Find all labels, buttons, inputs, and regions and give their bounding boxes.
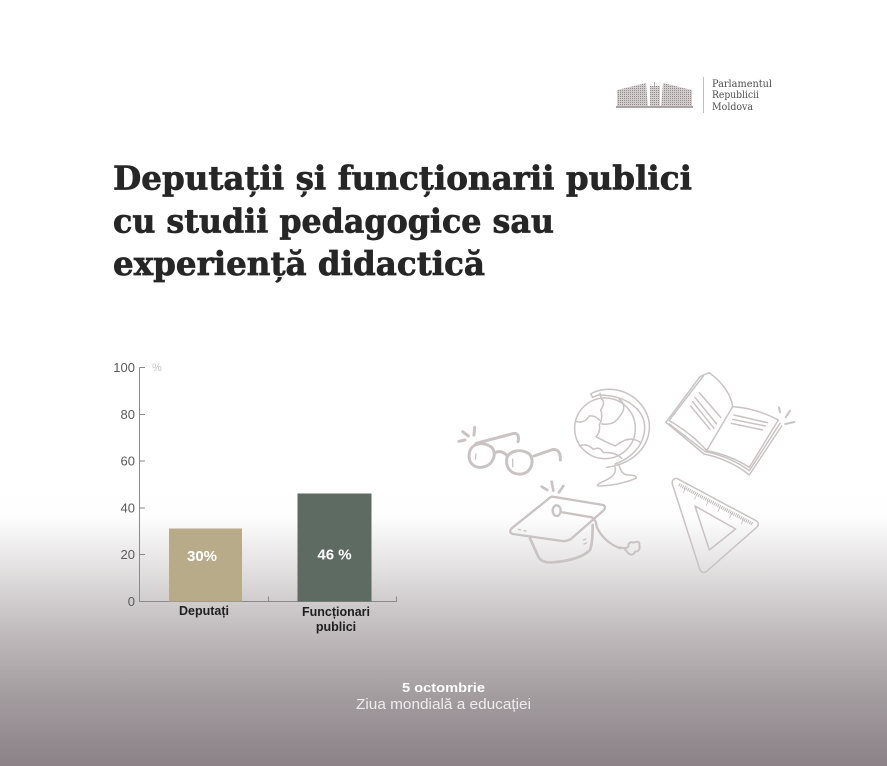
icon: tassel — [620, 542, 640, 555]
axes — [140, 368, 397, 602]
title: experiență didactică — [113, 244, 485, 283]
icon: parliament building — [616, 82, 693, 108]
bar: Funcționari publici 46% — [298, 494, 372, 602]
title: Deputații și funcționarii publici — [113, 158, 692, 198]
icon: graduation cap — [510, 482, 620, 562]
illustrations: education doodles — [459, 373, 794, 572]
x-axis labels: Deputați — [179, 604, 229, 618]
y-axis labels: 0 — [128, 594, 135, 609]
footer: date and occasion — [356, 680, 531, 713]
x-axis labels: publici — [316, 620, 356, 634]
bar chart — [113, 360, 397, 634]
y-axis labels: 20 — [121, 547, 135, 562]
x-axis labels — [179, 604, 370, 634]
icon: globe — [575, 389, 649, 486]
y-axis labels: 80 — [121, 407, 135, 422]
logo text — [712, 79, 772, 113]
bar: Deputați 30% — [169, 528, 242, 602]
y-axis labels — [113, 360, 135, 609]
bar: Deputați 30%: 30% — [187, 548, 217, 565]
y-axis labels: 60 — [121, 454, 135, 468]
y-axis unit: % — [152, 362, 162, 374]
y-axis labels: 40 — [121, 500, 135, 516]
bar: Funcționari publici 46%: 46 % — [317, 546, 352, 564]
logo text: Parlamentul — [712, 79, 772, 90]
logo text: Moldova — [712, 102, 753, 113]
icon: open book — [666, 373, 794, 475]
logo: Parlamentul Republicii Moldova — [616, 77, 772, 113]
logo text: Republicii — [712, 90, 759, 101]
title: cu studii pedagogice sau — [113, 202, 554, 240]
icon: set square ruler — [672, 478, 758, 572]
y-axis labels: 100 — [113, 360, 135, 375]
footer: date and occasion: 5 octombrie — [402, 680, 485, 695]
title — [113, 158, 692, 283]
x-axis labels: Funcționari — [302, 605, 370, 619]
icon: glasses — [459, 427, 560, 474]
footer: date and occasion: Ziua mondială a educației — [356, 697, 531, 713]
background gradient — [0, 490, 887, 766]
